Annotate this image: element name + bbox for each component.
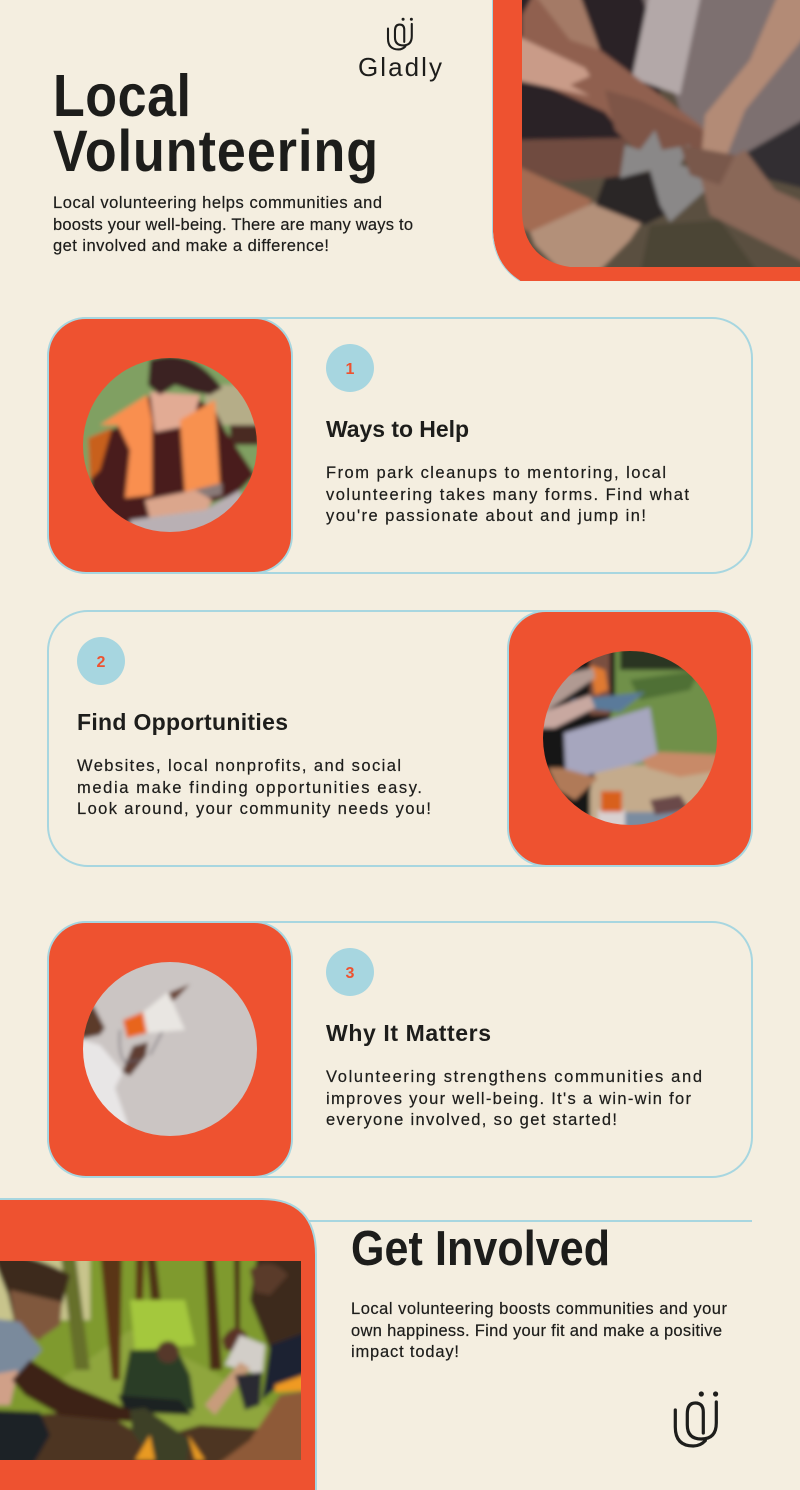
body text: you're passionate about and jump in!: [326, 507, 646, 525]
number badge: [326, 948, 374, 996]
body text: improves your well-being. It's a win-win for: [326, 1090, 692, 1108]
body text: From park cleanups to mentoring, local: [326, 464, 666, 482]
intro text: Local volunteering helps communities and: [53, 194, 382, 212]
panel: why it matters: [48, 922, 752, 1177]
photo: handing out flyers: [543, 651, 717, 825]
orange image tile: [508, 611, 752, 866]
card outline: [48, 922, 752, 1177]
intro text: boosts your well-being. There are many ways to: [53, 216, 413, 234]
body text: [326, 464, 689, 525]
divider line: [300, 1220, 752, 1222]
number badge: [326, 344, 374, 392]
backing outline: [492, 0, 520, 281]
body text: [326, 1068, 702, 1129]
logo wordmark: Gladly: [358, 52, 442, 82]
closing text: own happiness. Find your fit and make a positive: [351, 1322, 722, 1340]
card outline: [48, 318, 752, 573]
panel: header photo: [492, 0, 800, 281]
number badge: 3: [346, 965, 355, 982]
photo: stacked hands: [510, 0, 800, 280]
body text: media make finding opportunities easy.: [77, 779, 422, 797]
photo: volunteers in forest: [0, 1261, 301, 1460]
orange backing: [0, 1199, 316, 1490]
panel: find opportunities: [48, 611, 752, 866]
body text: Websites, local nonprofits, and social: [77, 757, 401, 775]
orange backing: [493, 0, 800, 281]
icon: Gladly mark: [388, 18, 413, 49]
body text: [77, 757, 431, 818]
number badge: 2: [97, 654, 106, 671]
heading: Find Opportunities: [77, 709, 288, 735]
orange image tile: [48, 318, 292, 573]
intro text: get involved and make a difference!: [53, 237, 329, 255]
body text: volunteering takes many forms. Find what: [326, 486, 689, 504]
orange image tile: [48, 922, 292, 1177]
heading: Ways to Help: [326, 416, 469, 442]
card outline: [48, 611, 752, 866]
closing text: Local volunteering boosts communities and your: [351, 1300, 728, 1318]
body text: Look around, your community needs you!: [77, 800, 431, 818]
body text: Volunteering strengthens communities and: [326, 1068, 702, 1086]
icon: Gladly mark footer: [675, 1391, 718, 1446]
panel: ways to help: [48, 318, 752, 573]
photo: volunteer in vest: [83, 358, 257, 532]
number badge: [77, 637, 125, 685]
title: Volunteering: [53, 118, 378, 184]
title: Local: [53, 63, 191, 129]
logo: Gladly: [358, 18, 442, 82]
title: [53, 63, 378, 184]
heading: Why It Matters: [326, 1020, 491, 1046]
closing text: impact today!: [351, 1343, 459, 1361]
number badge: 1: [346, 361, 355, 378]
panel: get involved image: [0, 1199, 752, 1490]
closing text: [351, 1300, 728, 1361]
intro text: [53, 194, 413, 255]
photo: person with megaphone: [83, 962, 257, 1136]
body text: everyone involved, so get started!: [326, 1111, 617, 1129]
heading: get involved: Get Involved: [351, 1220, 610, 1276]
